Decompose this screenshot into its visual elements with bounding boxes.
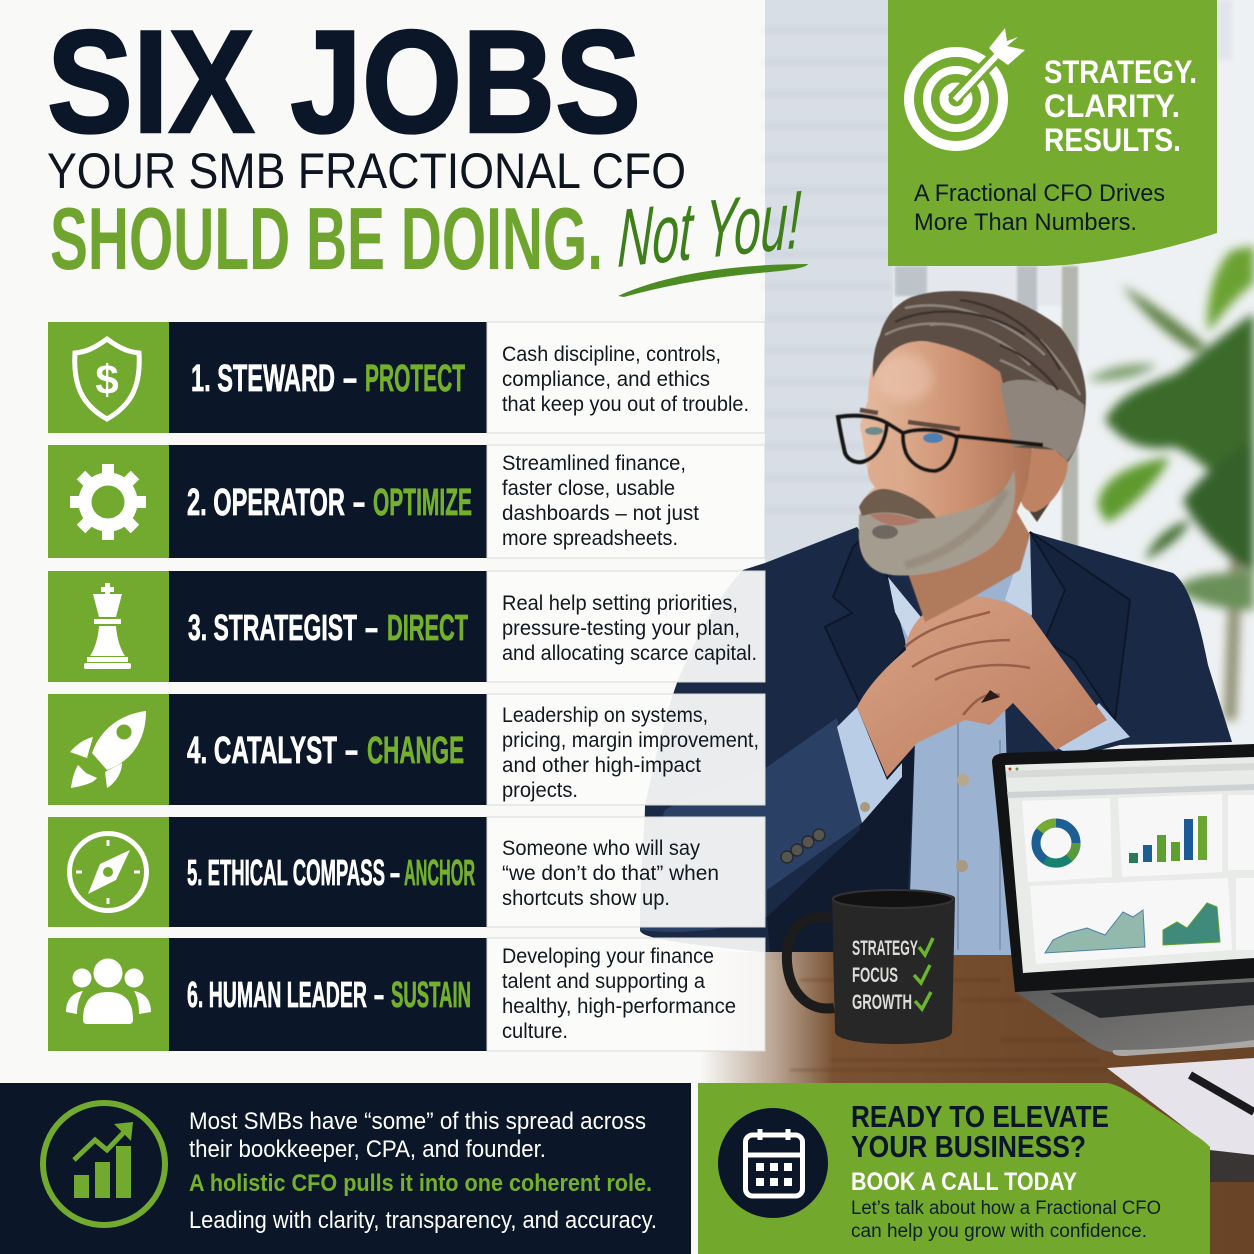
row label: 4. CATALYST (187, 730, 337, 772)
panel: holistic CFO summary (0, 1083, 691, 1254)
row label: – (353, 482, 365, 524)
plant (1087, 246, 1254, 720)
photo: office window, fractional CFO with mug and laptop (640, 0, 1254, 1254)
beard (859, 470, 1015, 575)
row label: – (374, 974, 384, 1015)
row description: more spreadsheets. (502, 527, 678, 550)
icon: gear (70, 464, 146, 540)
row description: Streamlined finance, (502, 452, 686, 475)
hair behind ear (1025, 470, 1060, 522)
jacket sleeve buttons (781, 829, 825, 863)
icon: calendar (718, 1108, 828, 1218)
neck (905, 500, 1030, 622)
panel: strategy callout (888, 0, 1217, 266)
mug (787, 890, 955, 1044)
cuffs (837, 703, 1130, 823)
icon: compass (70, 834, 146, 910)
callout tagline: CLARITY. (1044, 88, 1180, 124)
mug text (852, 937, 918, 1014)
row label: – (390, 852, 400, 893)
summary text: Leading with clarity, transparency, and accuracy. (189, 1207, 657, 1234)
mug text: GROWTH (852, 991, 912, 1014)
row description: talent and supporting a (502, 970, 705, 993)
title: SIX JOBS: SIX JOBS (47, 0, 641, 163)
CTA heading: YOUR BUSINESS? (851, 1129, 1086, 1164)
row label: – (343, 358, 357, 400)
row description: and other high-impact (502, 754, 701, 777)
row label: – (365, 607, 378, 648)
shirt (888, 533, 1032, 955)
callout tagline: RESULTS. (1044, 122, 1181, 158)
row label: – (345, 730, 358, 772)
handwritten accent: Not You!: Not You! (616, 173, 803, 285)
mug text: STRATEGY (852, 937, 918, 960)
CTA description: Let’s talk about how a Fractional CFO (851, 1198, 1161, 1219)
row description (502, 343, 749, 416)
row description (502, 704, 759, 802)
hair (873, 291, 1086, 462)
subtitle line: YOUR SMB FRACTIONAL CFO (47, 143, 686, 199)
row label: SUSTAIN (391, 974, 471, 1015)
desk (700, 952, 1254, 1254)
laptop (992, 744, 1254, 1056)
row 5: ethical compass: ANCHOR (404, 852, 475, 893)
mug checks (914, 938, 933, 1009)
green headline: SHOULD BE DOING. (50, 189, 603, 288)
sleeve (640, 718, 862, 932)
suit jacket (640, 527, 1232, 952)
row label: PROTECT (365, 358, 465, 400)
icon: growth chart (43, 1103, 165, 1225)
CTA description (851, 1198, 1161, 1242)
row label: 6. HUMAN LEADER (187, 974, 367, 1015)
eyes (865, 427, 883, 435)
row 6: human leader (48, 938, 765, 1051)
row description: culture. (502, 1020, 568, 1043)
CTA heading: READY TO ELEVATE (851, 1099, 1109, 1134)
left lapel (825, 540, 908, 703)
laptop dashboard (1022, 794, 1254, 964)
mustache (859, 489, 936, 519)
row description: Someone who will say (502, 837, 700, 860)
row description: “we don’t do that” when (502, 862, 719, 885)
icon: shield with dollar (75, 339, 139, 419)
nose shadow (868, 440, 905, 492)
right lapel (1030, 532, 1130, 720)
row 3: strategist (48, 571, 765, 682)
jacket body shadow (767, 730, 915, 952)
row description (502, 592, 757, 665)
row description (502, 452, 699, 550)
icon: chess king (84, 583, 131, 669)
row description: Cash discipline, controls, (502, 343, 721, 366)
row 5: ethical compass (48, 817, 765, 927)
callout subtext: A Fractional CFO Drives (914, 180, 1165, 207)
face (859, 341, 1040, 575)
callout subtext (914, 180, 1165, 236)
row description: Real help setting priorities, (502, 592, 738, 615)
row description: projects. (502, 779, 578, 802)
row label: DIRECT (387, 607, 468, 648)
icon: target with arrow (909, 28, 1025, 146)
row label: 2. OPERATOR (187, 482, 345, 524)
summary text: their bookkeeper, CPA, and founder. (189, 1136, 546, 1163)
row label: 5. ETHICAL COMPASS (187, 852, 385, 893)
row description: pressure-testing your plan, (502, 617, 740, 640)
row description: pricing, margin improvement, (502, 729, 759, 752)
summary text (189, 1108, 657, 1234)
callout tagline: STRATEGY. (1044, 54, 1197, 90)
window backdrop (765, 0, 1254, 960)
panel: call to action (698, 1083, 1210, 1254)
row description: dashboards – not just (502, 502, 699, 525)
grey temple (1000, 380, 1084, 462)
ear (1019, 445, 1068, 512)
row description: compliance, and ethics (502, 368, 710, 391)
row description: and allocating scarce capital. (502, 642, 757, 665)
row description: Leadership on systems, (502, 704, 708, 727)
row label: 3. STRATEGIST (188, 607, 357, 648)
row description: faster close, usable (502, 477, 675, 500)
row description (502, 837, 719, 910)
laptop browser bar (1006, 763, 1254, 798)
head (838, 291, 1086, 622)
handwritten accent: Not You! (616, 173, 808, 297)
row 2: operator (48, 445, 765, 558)
icon: people (66, 958, 151, 1024)
brows (860, 410, 960, 429)
hair strands (885, 305, 1080, 405)
row description: healthy, high-performance (502, 995, 736, 1018)
summary text: Most SMBs have “some” of this spread across (189, 1108, 646, 1135)
glasses (838, 416, 1043, 471)
callout tagline (1044, 54, 1197, 158)
lips (870, 513, 920, 526)
icon: rocket (70, 711, 146, 788)
summary text: A holistic CFO pulls it into one coherent role. (189, 1170, 652, 1197)
row description: Developing your finance (502, 945, 714, 968)
row description: shortcuts show up. (502, 887, 670, 910)
icon: shield with dollar: $ (95, 356, 119, 403)
forehead highlight (877, 354, 933, 402)
row label: OPTIMIZE (373, 482, 472, 524)
notepad and pen on desk (1107, 1058, 1254, 1182)
chin patch (872, 525, 898, 539)
clasped hands (857, 596, 1107, 777)
row label: 1. STEWARD (191, 358, 335, 400)
CTA description: can help you grow with confidence. (851, 1221, 1147, 1242)
mug text: FOCUS (852, 964, 898, 987)
row 4: catalyst (48, 694, 765, 805)
row description: that keep you out of trouble. (502, 393, 749, 416)
beard shading (905, 490, 1005, 565)
CTA button text: BOOK A CALL TODAY (851, 1168, 1077, 1196)
CTA heading (851, 1099, 1109, 1164)
row label: CHANGE (367, 730, 464, 772)
row 1: steward (48, 322, 765, 433)
row description (502, 945, 736, 1043)
callout subtext: More Than Numbers. (914, 209, 1137, 236)
